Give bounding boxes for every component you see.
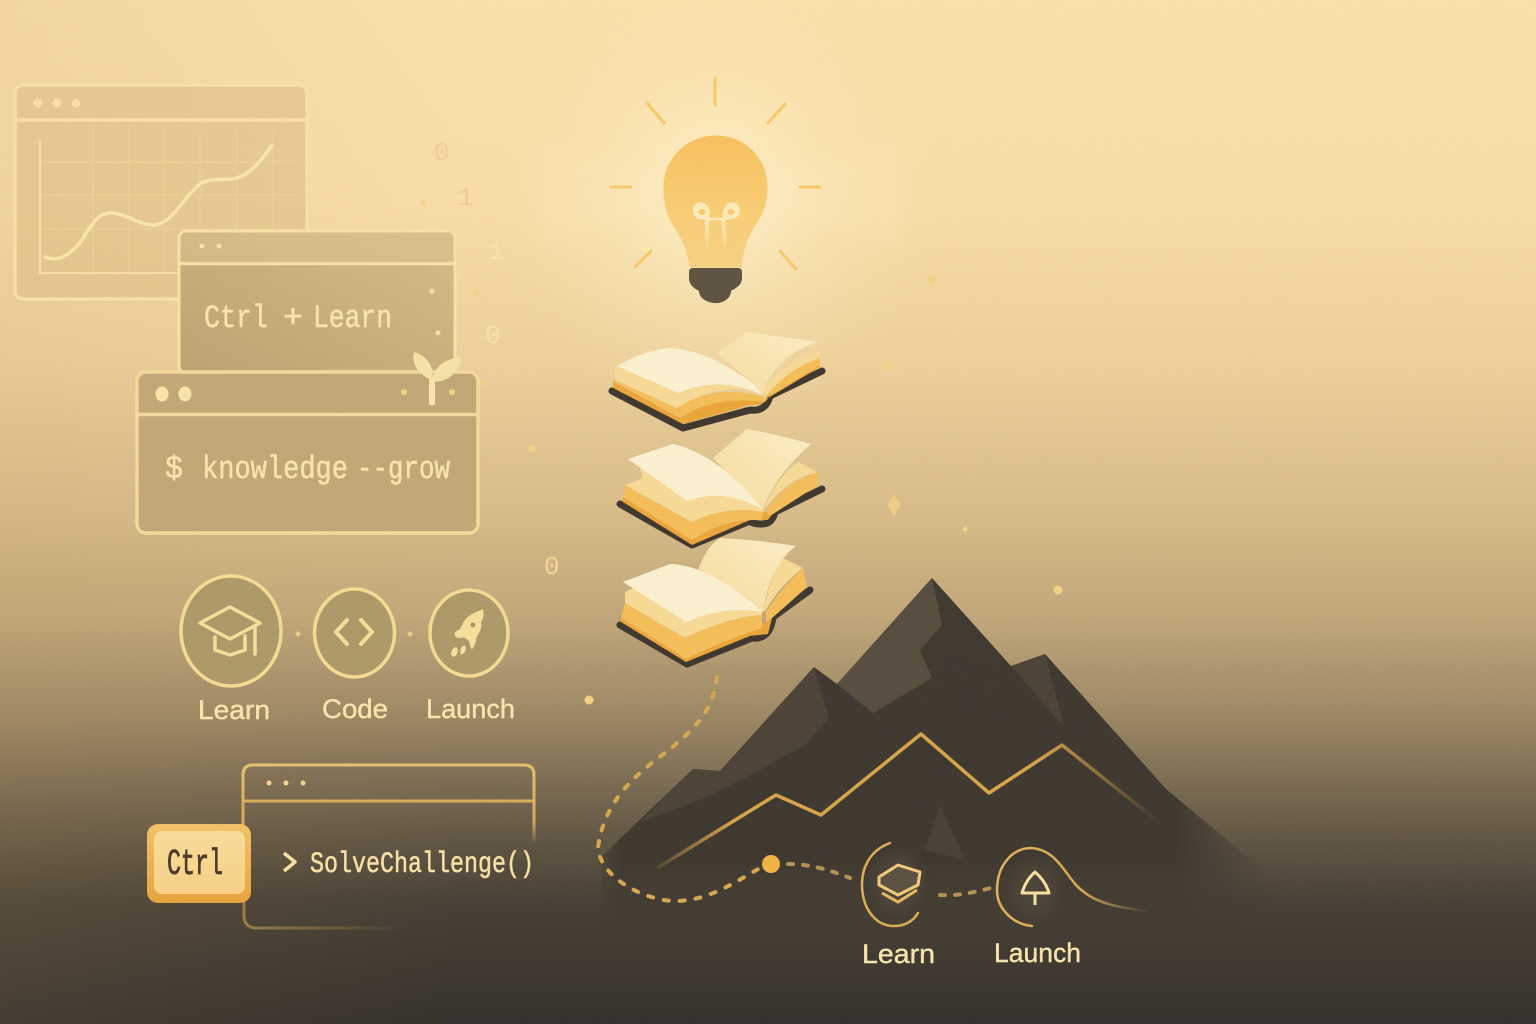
knowledge grow terminal window — [137, 372, 478, 533]
Launch milestone icon — [994, 848, 1146, 968]
terminal command: knowledge — [202, 451, 348, 488]
Code label: Code — [322, 694, 388, 724]
dashed path to milestone — [598, 677, 760, 901]
Launch label: Launch — [426, 694, 515, 724]
bulb rays — [611, 78, 820, 269]
Launch step: rocket icon — [426, 590, 515, 724]
ambient binary digits: 0 — [434, 138, 450, 168]
stacked book 3 — [620, 538, 810, 664]
SolveChallenge window — [243, 765, 534, 928]
stacked book 1 — [612, 332, 822, 428]
terminal command — [165, 451, 450, 488]
Learn label: Learn — [198, 695, 270, 725]
stacked book 2 — [620, 429, 822, 545]
terminal command: --grow — [357, 451, 450, 488]
milestone dot — [762, 855, 780, 873]
terminal command: $ — [165, 451, 183, 488]
Ctrl + Learn label: + — [283, 300, 303, 337]
gold ridge line — [657, 734, 1160, 868]
Learn label: Learn — [862, 939, 935, 969]
Launch label: Launch — [994, 938, 1081, 968]
Learn milestone icon — [862, 843, 935, 969]
mountain lit faces — [837, 578, 942, 713]
prompt chevron — [284, 853, 295, 871]
chart growth line — [45, 145, 272, 259]
Ctrl + Learn window — [179, 231, 455, 373]
chart window — [15, 85, 307, 299]
ambient binary digits — [434, 138, 560, 582]
mountain range — [602, 578, 1244, 895]
ambient binary digits: 1 — [489, 237, 505, 267]
dashed path onward — [788, 864, 995, 895]
Ctrl keycap — [147, 824, 251, 903]
bulb filament — [693, 202, 740, 252]
sparkle dots near windows — [295, 201, 1062, 705]
icon: sprout — [413, 352, 462, 405]
ambient binary digits: 0 — [544, 552, 560, 582]
Learn step: graduation cap icon — [181, 576, 281, 725]
code line: SolveChallenge() — [310, 848, 534, 882]
Code step: brackets icon — [314, 589, 394, 724]
Ctrl + Learn label: Ctrl — [204, 300, 268, 337]
Ctrl keycap: Ctrl — [167, 844, 223, 885]
bulb base — [689, 268, 742, 303]
Ctrl + Learn label: Learn — [313, 300, 392, 337]
bulb glass — [663, 135, 768, 268]
ambient binary digits: 0 — [485, 321, 501, 351]
Ctrl + Learn label — [204, 300, 392, 337]
chart axes — [40, 140, 178, 273]
ambient binary digits: 1 — [458, 183, 474, 213]
light bulb — [611, 78, 820, 303]
